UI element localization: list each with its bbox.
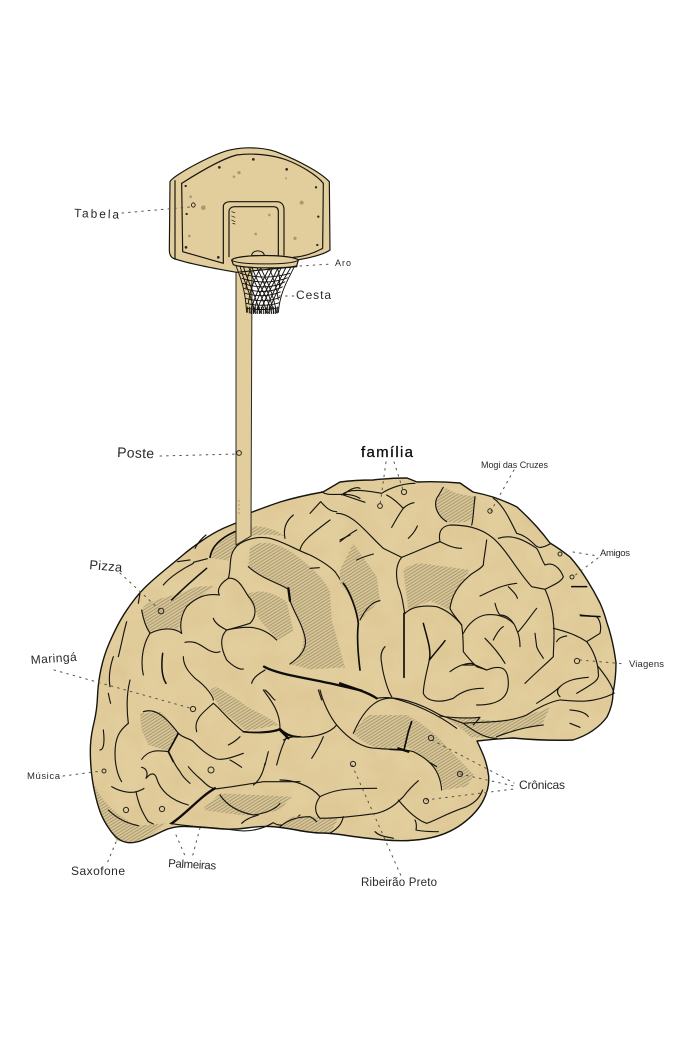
label marker <box>191 203 195 207</box>
label: Crônicas: Crônicas <box>519 778 565 792</box>
label: Poste: Poste <box>117 444 155 461</box>
label: Palmeiras: Palmeiras <box>168 858 217 873</box>
rim bracket <box>252 251 264 256</box>
rim <box>232 255 298 268</box>
label: Mogi das Cruzes: Mogi das Cruzes <box>481 460 548 470</box>
label: Saxofone: Saxofone <box>71 864 125 878</box>
label: família: família <box>361 444 414 461</box>
board shape <box>169 148 330 272</box>
brain outline <box>90 478 616 843</box>
temporal lobe sulci <box>280 690 483 838</box>
brain <box>85 470 625 850</box>
label: Pizza: Pizza <box>89 557 124 575</box>
illustration: basketball hoop growing out of a brain <box>28 147 664 886</box>
label: Música: Música <box>27 771 61 782</box>
board inner lines <box>175 154 323 263</box>
label: Aro: Aro <box>335 258 351 268</box>
label: Cesta: Cesta <box>296 288 331 302</box>
leader lines and markers <box>54 207 626 878</box>
label: Tabela: Tabela <box>74 206 120 222</box>
upper-left sulci <box>109 488 362 700</box>
brain fill <box>90 478 616 843</box>
label: Amigos: Amigos <box>600 548 630 559</box>
label: Ribeirão Preto: Ribeirão Preto <box>361 877 437 889</box>
label: Maringá: Maringá <box>30 650 77 667</box>
backboard <box>169 148 330 314</box>
label: Viagens: Viagens <box>629 659 664 670</box>
pole <box>236 268 252 545</box>
lower-left sulci <box>92 680 300 843</box>
net <box>236 265 295 314</box>
upper-right sulci <box>337 483 614 738</box>
screws and specks <box>184 158 319 259</box>
paper texture <box>85 470 625 850</box>
